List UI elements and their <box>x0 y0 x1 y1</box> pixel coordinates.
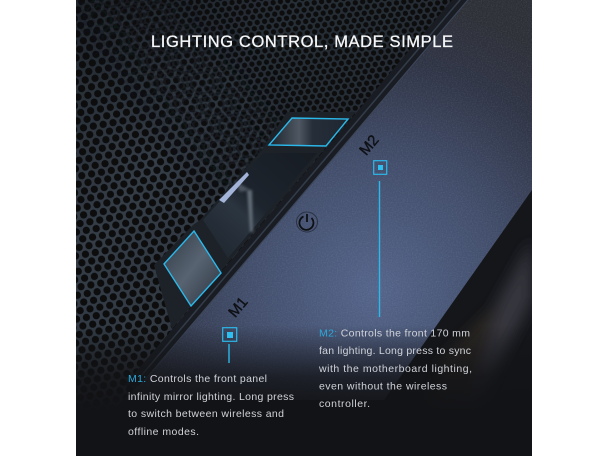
text block: M2 description: fan lighting. Long press to sync <box>319 345 471 357</box>
button: M2 outlined <box>269 118 348 146</box>
bottom fade <box>76 325 532 456</box>
infographic panel <box>76 0 532 456</box>
photo background <box>76 0 532 406</box>
text block: M1 description: offline modes. <box>128 426 199 438</box>
text block: M1 description: infinity mirror lighting. Long press <box>128 391 294 403</box>
text block: M2 description: M2: Controls the front 170 mm <box>319 328 470 340</box>
label: M1: M1 <box>225 294 252 321</box>
button: middle power bar <box>203 153 317 258</box>
icon: power symbol <box>296 212 318 232</box>
button sheen fan <box>234 180 250 192</box>
callout marker: M2 <box>374 161 387 317</box>
frame highlight line <box>139 0 461 377</box>
mesh grille <box>76 0 452 378</box>
title: LIGHTING CONTROL, MADE SIMPLE <box>151 33 453 51</box>
button bezel <box>154 112 356 329</box>
button: M1 outlined <box>164 231 221 306</box>
frame outer edge line <box>139 0 468 386</box>
text block: M1 description: to switch between wireless and <box>128 408 284 420</box>
text block: M2 description <box>318 328 472 410</box>
text block: M2 description: controller. <box>319 398 370 410</box>
diagonal frame strip <box>124 0 468 386</box>
text block: M2 description: with the motherboard lighting, <box>318 363 472 375</box>
label: M2: M2 <box>356 132 383 159</box>
text block: M1 description <box>128 373 294 438</box>
indicator light bar <box>219 172 249 203</box>
button sheen streak <box>247 190 253 232</box>
textured side panel <box>125 0 532 400</box>
text block: M1 description: M1: Controls the front panel <box>128 373 267 385</box>
callout marker: M1 <box>223 328 237 363</box>
text block: M2 description: even without the wireless <box>319 380 447 392</box>
blurred background light <box>430 240 532 420</box>
panel grain <box>125 0 532 400</box>
